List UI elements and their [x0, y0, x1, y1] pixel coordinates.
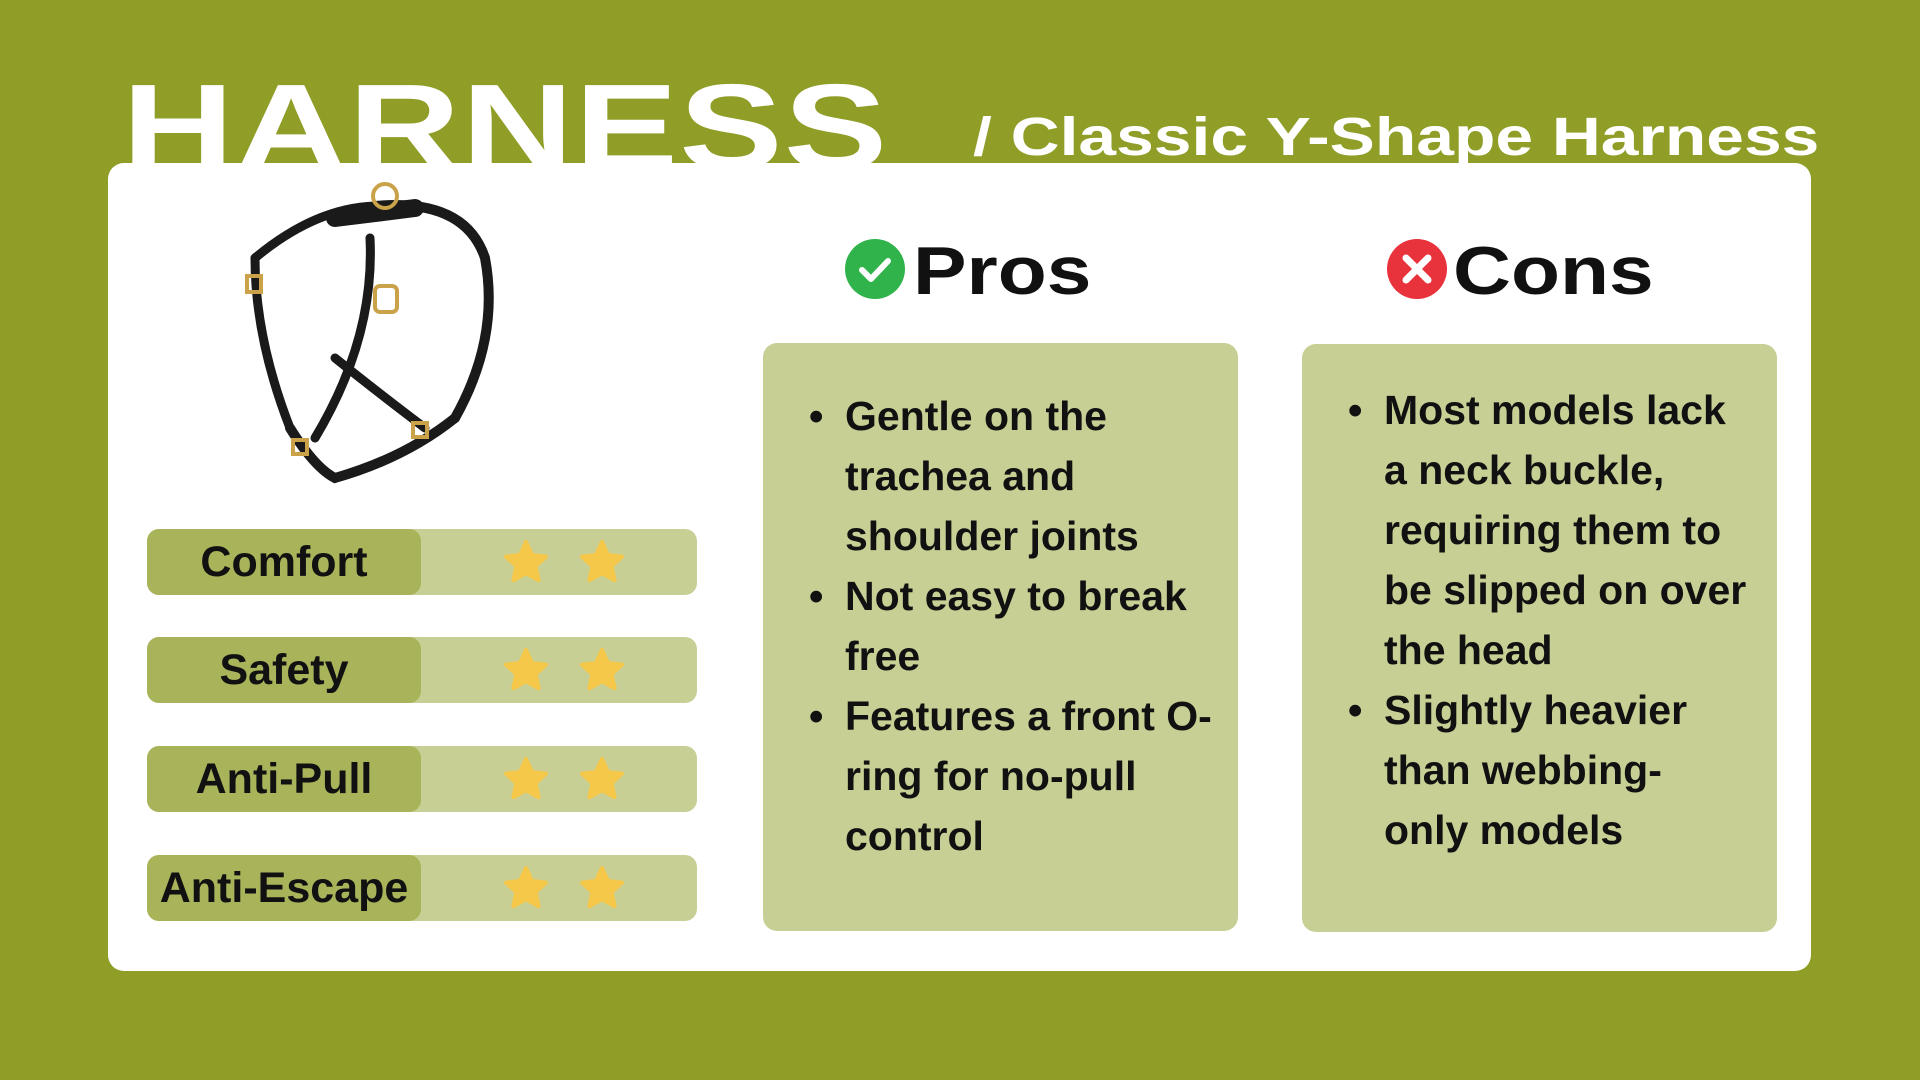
icon: harness image	[245, 182, 494, 484]
title: HARNESS	[122, 59, 889, 195]
pros list: trachea and	[845, 453, 1075, 499]
heading: Cons: Cons	[1453, 233, 1654, 309]
pros list: shoulder joints	[845, 513, 1139, 559]
pros list: free	[845, 633, 920, 679]
cons list: a neck buckle,	[1384, 447, 1664, 493]
cons list: the head	[1384, 627, 1553, 673]
pros list: •	[809, 393, 823, 439]
rating: Comfort	[147, 529, 697, 595]
pros list: control	[845, 813, 984, 859]
heading: Pros: Pros	[913, 233, 1091, 309]
rating: Anti-Escape	[147, 855, 697, 921]
rating: Anti-Pull: Anti-Pull	[196, 755, 372, 803]
rating: Safety	[147, 637, 697, 703]
panel: cons	[1302, 344, 1777, 932]
pros list: Not easy to break	[845, 573, 1187, 619]
panel: pros	[763, 343, 1238, 931]
cons list	[1348, 387, 1746, 853]
icon: cross	[1387, 239, 1447, 299]
subtitle: / Classic Y-Shape Harness	[973, 107, 1819, 167]
card panel	[108, 163, 1811, 971]
cons list: be slipped on over	[1384, 567, 1746, 613]
pros list: Gentle on the	[845, 393, 1107, 439]
cons list: Most models lack	[1384, 387, 1726, 433]
cons list: Slightly heavier	[1384, 687, 1687, 733]
pros list: •	[809, 573, 823, 619]
pros list: •	[809, 693, 823, 739]
pros list: Features a front O-	[845, 693, 1212, 739]
rating: Anti-Pull	[147, 746, 697, 812]
cons list: requiring them to	[1384, 507, 1721, 553]
rating: Comfort: Comfort	[200, 538, 368, 586]
cons list: •	[1348, 387, 1362, 433]
rating: Safety: Safety	[219, 646, 349, 694]
cons list: •	[1348, 687, 1362, 733]
rating: Anti-Escape: Anti-Escape	[160, 864, 408, 912]
pros list: ring for no-pull	[845, 753, 1136, 799]
cons list: than webbing-	[1384, 747, 1662, 793]
icon: check	[845, 239, 905, 299]
pros list	[809, 393, 1212, 859]
cons list: only models	[1384, 807, 1623, 853]
